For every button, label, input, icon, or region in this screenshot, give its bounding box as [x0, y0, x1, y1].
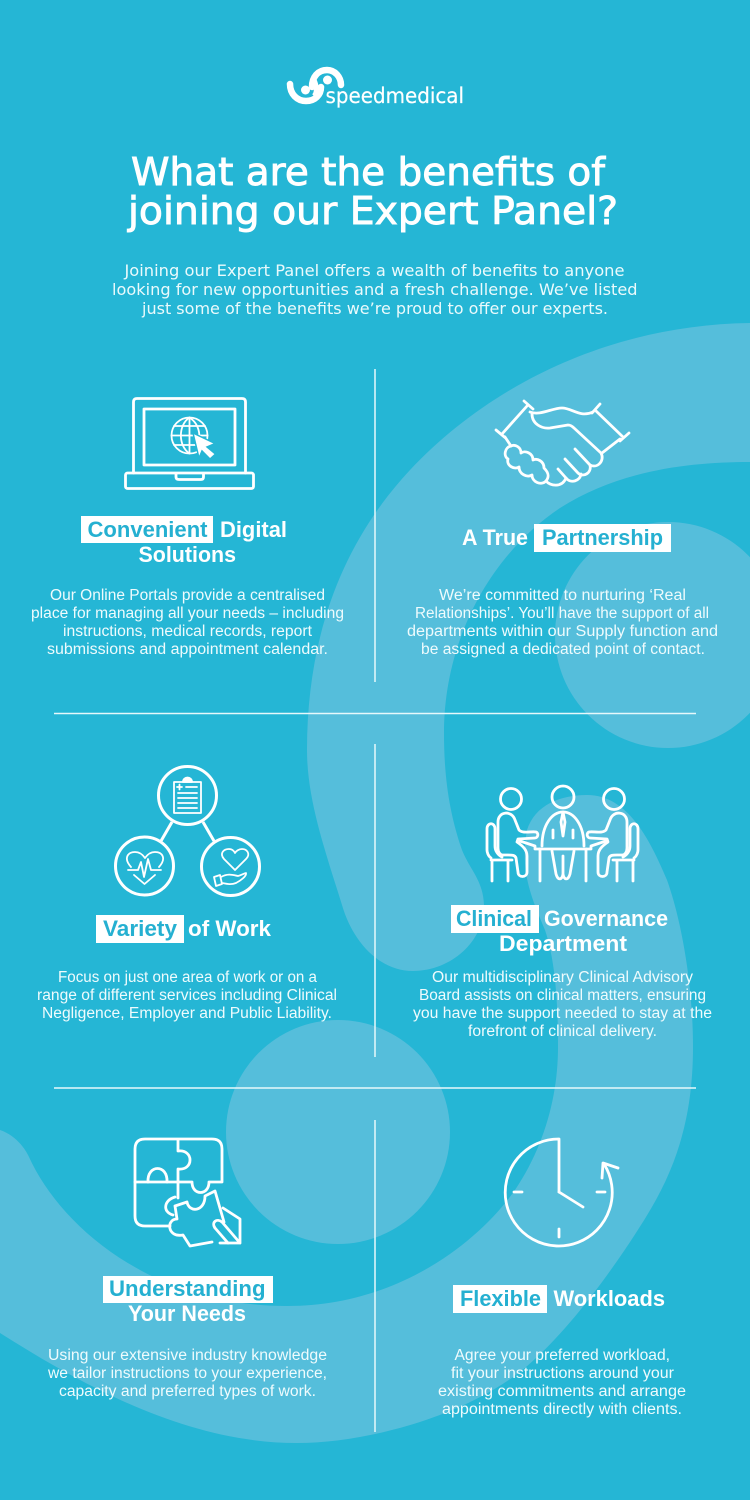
heading: understanding your needs: Understanding: [109, 1276, 266, 1301]
icon: clock with circular arrow: [505, 1139, 618, 1246]
heading: clinical governance department: Governance: [544, 906, 668, 931]
text: flexible workloads: appointments directly with clients.: [442, 1401, 682, 1418]
heading: variety of work: [96, 915, 272, 943]
panel: understanding your needs: [47, 1139, 327, 1400]
heading: a true partnership: Partnership: [542, 525, 663, 550]
heading: flexible workloads: Workloads: [554, 1286, 665, 1311]
intro paragraph: looking for new opportunities and a fresh challenge. We’ve listed: [112, 280, 638, 299]
heading: convenient digital solutions: Digital: [220, 517, 287, 542]
icon: three people meeting at a table: [487, 786, 638, 881]
panel: convenient digital solutions: [31, 398, 344, 658]
text: variety of work: [37, 969, 337, 1022]
background: decorative swirl shapes: [0, 323, 750, 1443]
heading: variety of work: Variety: [103, 916, 178, 941]
panel: a true partnership: [407, 401, 718, 658]
heading: convenient digital solutions: [81, 516, 287, 567]
text: flexible workloads: existing commitments and arrange: [438, 1383, 686, 1400]
text: variety of work: Negligence, Employer and Public Liability.: [42, 1005, 332, 1022]
heading: a true partnership: [462, 524, 671, 552]
logo: speedmedical: [290, 70, 464, 108]
text: a true partnership: We’re committed to nurturing ‘Real: [439, 587, 686, 604]
text: clinical governance department: [413, 969, 712, 1040]
text: understanding your needs: Using our extensive industry knowledge: [48, 1347, 327, 1364]
text: flexible workloads: fit your instructions around your: [451, 1365, 674, 1382]
text: convenient digital solutions: instructions, medical records, report: [63, 623, 313, 640]
heading: a true partnership: A True: [462, 525, 528, 550]
heading: clinical governance department: Clinical: [456, 906, 532, 931]
heading: flexible workloads: Flexible: [460, 1286, 541, 1311]
panel: clinical governance department: [413, 786, 712, 1040]
text: convenient digital solutions: Our Online Portals provide a centralised: [50, 587, 325, 604]
icon: jigsaw puzzle with hand placing piece: [135, 1139, 240, 1246]
panel: variety of work: [37, 766, 337, 1022]
title: What are the benefits of: [131, 150, 607, 194]
text: understanding your needs: [47, 1347, 327, 1400]
text: flexible workloads: Agree your preferred workload,: [454, 1347, 670, 1364]
text: clinical governance department: forefront of clinical delivery.: [468, 1023, 657, 1040]
intro paragraph: [112, 261, 638, 318]
heading: understanding your needs: Your Needs: [128, 1301, 246, 1326]
text: convenient digital solutions: [31, 587, 344, 658]
text: clinical governance department: Board assists on clinical matters, ensuring: [419, 987, 706, 1004]
heading: understanding your needs: [103, 1276, 273, 1326]
heading: convenient digital solutions: Solutions: [138, 542, 236, 567]
title: [127, 150, 618, 233]
heading: convenient digital solutions: Convenient: [88, 517, 208, 542]
text: understanding your needs: we tailor instructions to your experience,: [47, 1365, 327, 1382]
text: flexible workloads: [438, 1347, 686, 1418]
intro paragraph: just some of the benefits we’re proud to offer our experts.: [141, 299, 608, 318]
heading: flexible workloads: [453, 1285, 665, 1313]
text: a true partnership: [407, 587, 718, 658]
heading: clinical governance department: [451, 905, 668, 956]
icon: three linked circles with clipboard, heartbeat and caring hand: [116, 766, 260, 896]
text: a true partnership: Relationships’. You’ll have the support of all: [415, 605, 709, 622]
text: convenient digital solutions: place for managing all your needs – including: [31, 605, 344, 622]
intro paragraph: Joining our Expert Panel offers a wealth of benefits to anyone: [123, 261, 624, 280]
text: a true partnership: be assigned a dedicated point of contact.: [421, 641, 705, 658]
text: understanding your needs: capacity and preferred types of work.: [59, 1383, 316, 1400]
text: a true partnership: departments within our Supply function and: [407, 623, 718, 640]
text: variety of work: range of different services including Clinical: [37, 987, 337, 1004]
logo: speedmedical: speedmedical: [326, 84, 464, 108]
icon: handshake: [496, 401, 629, 485]
panel: flexible workloads: [438, 1139, 686, 1418]
text: clinical governance department: Our multidisciplinary Clinical Advisory: [432, 969, 693, 986]
text: convenient digital solutions: submissions and appointment calendar.: [47, 641, 328, 658]
text: variety of work: Focus on just one area of work or on a: [58, 969, 317, 986]
title: joining our Expert Panel?: [127, 189, 618, 233]
text: clinical governance department: you have the support needed to stay at the: [413, 1005, 712, 1022]
heading: variety of work: of Work: [188, 916, 272, 941]
icon: laptop with globe and cursor: [126, 398, 254, 488]
heading: clinical governance department: Department: [499, 931, 628, 956]
